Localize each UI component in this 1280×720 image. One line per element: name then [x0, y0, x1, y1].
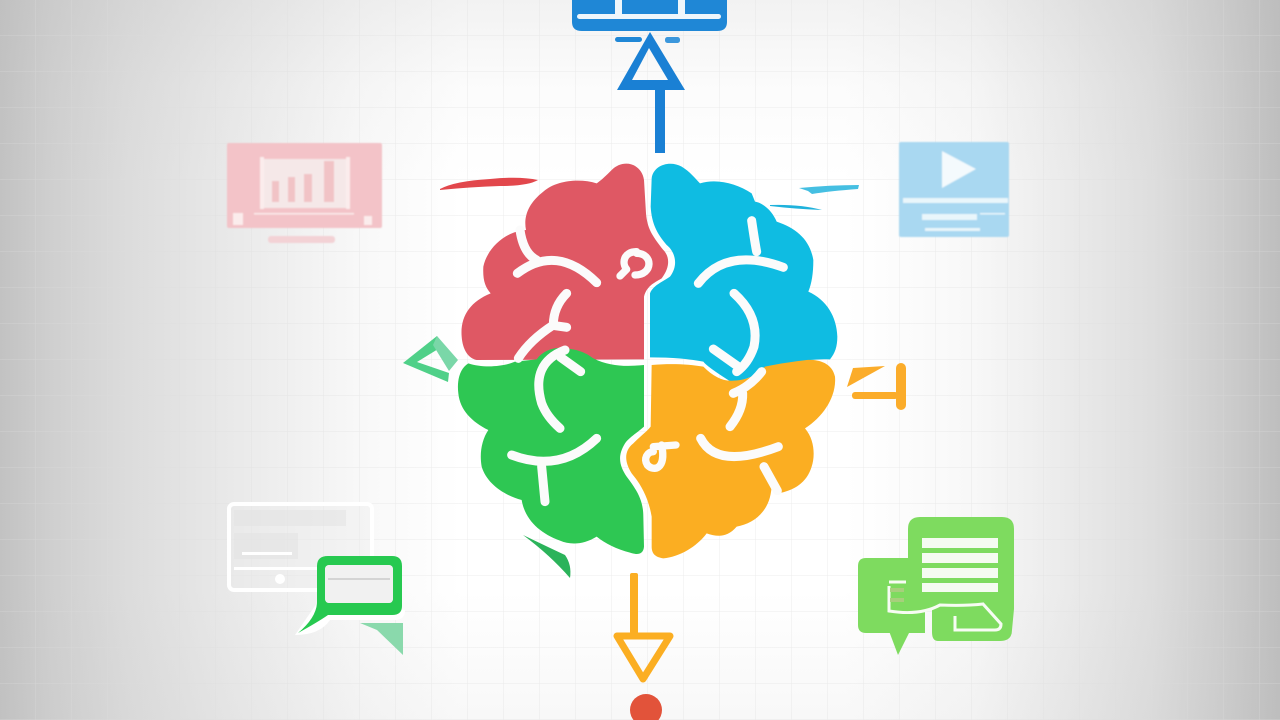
brush strokes: blue	[770, 185, 859, 210]
icon: green chat bubbles with text	[858, 517, 1014, 655]
red circle node	[630, 694, 662, 720]
arrow: blue upward	[615, 32, 685, 153]
brain lobe: red	[461, 164, 668, 360]
brain sulci: white folds	[512, 221, 783, 502]
icon: faded red dashboard monitor	[227, 143, 382, 243]
icon: faded blue video panel	[899, 142, 1009, 237]
faded green tail	[360, 623, 403, 655]
brush stroke: red	[440, 178, 538, 190]
arrow: orange right	[847, 363, 906, 410]
brain lobe: blue	[650, 164, 837, 383]
keyboard outline	[889, 582, 1001, 630]
icon: white outlined monitor	[229, 504, 372, 590]
icon: green chat bubble	[295, 556, 405, 635]
brain	[458, 164, 837, 558]
brain lobe: green	[458, 348, 644, 554]
arrow: orange downward	[617, 573, 670, 679]
brain lobe: orange	[626, 360, 835, 558]
arrow: green left	[403, 336, 458, 382]
icon: blue monitor (top)	[572, 0, 727, 31]
leaf accent: green	[523, 535, 570, 578]
